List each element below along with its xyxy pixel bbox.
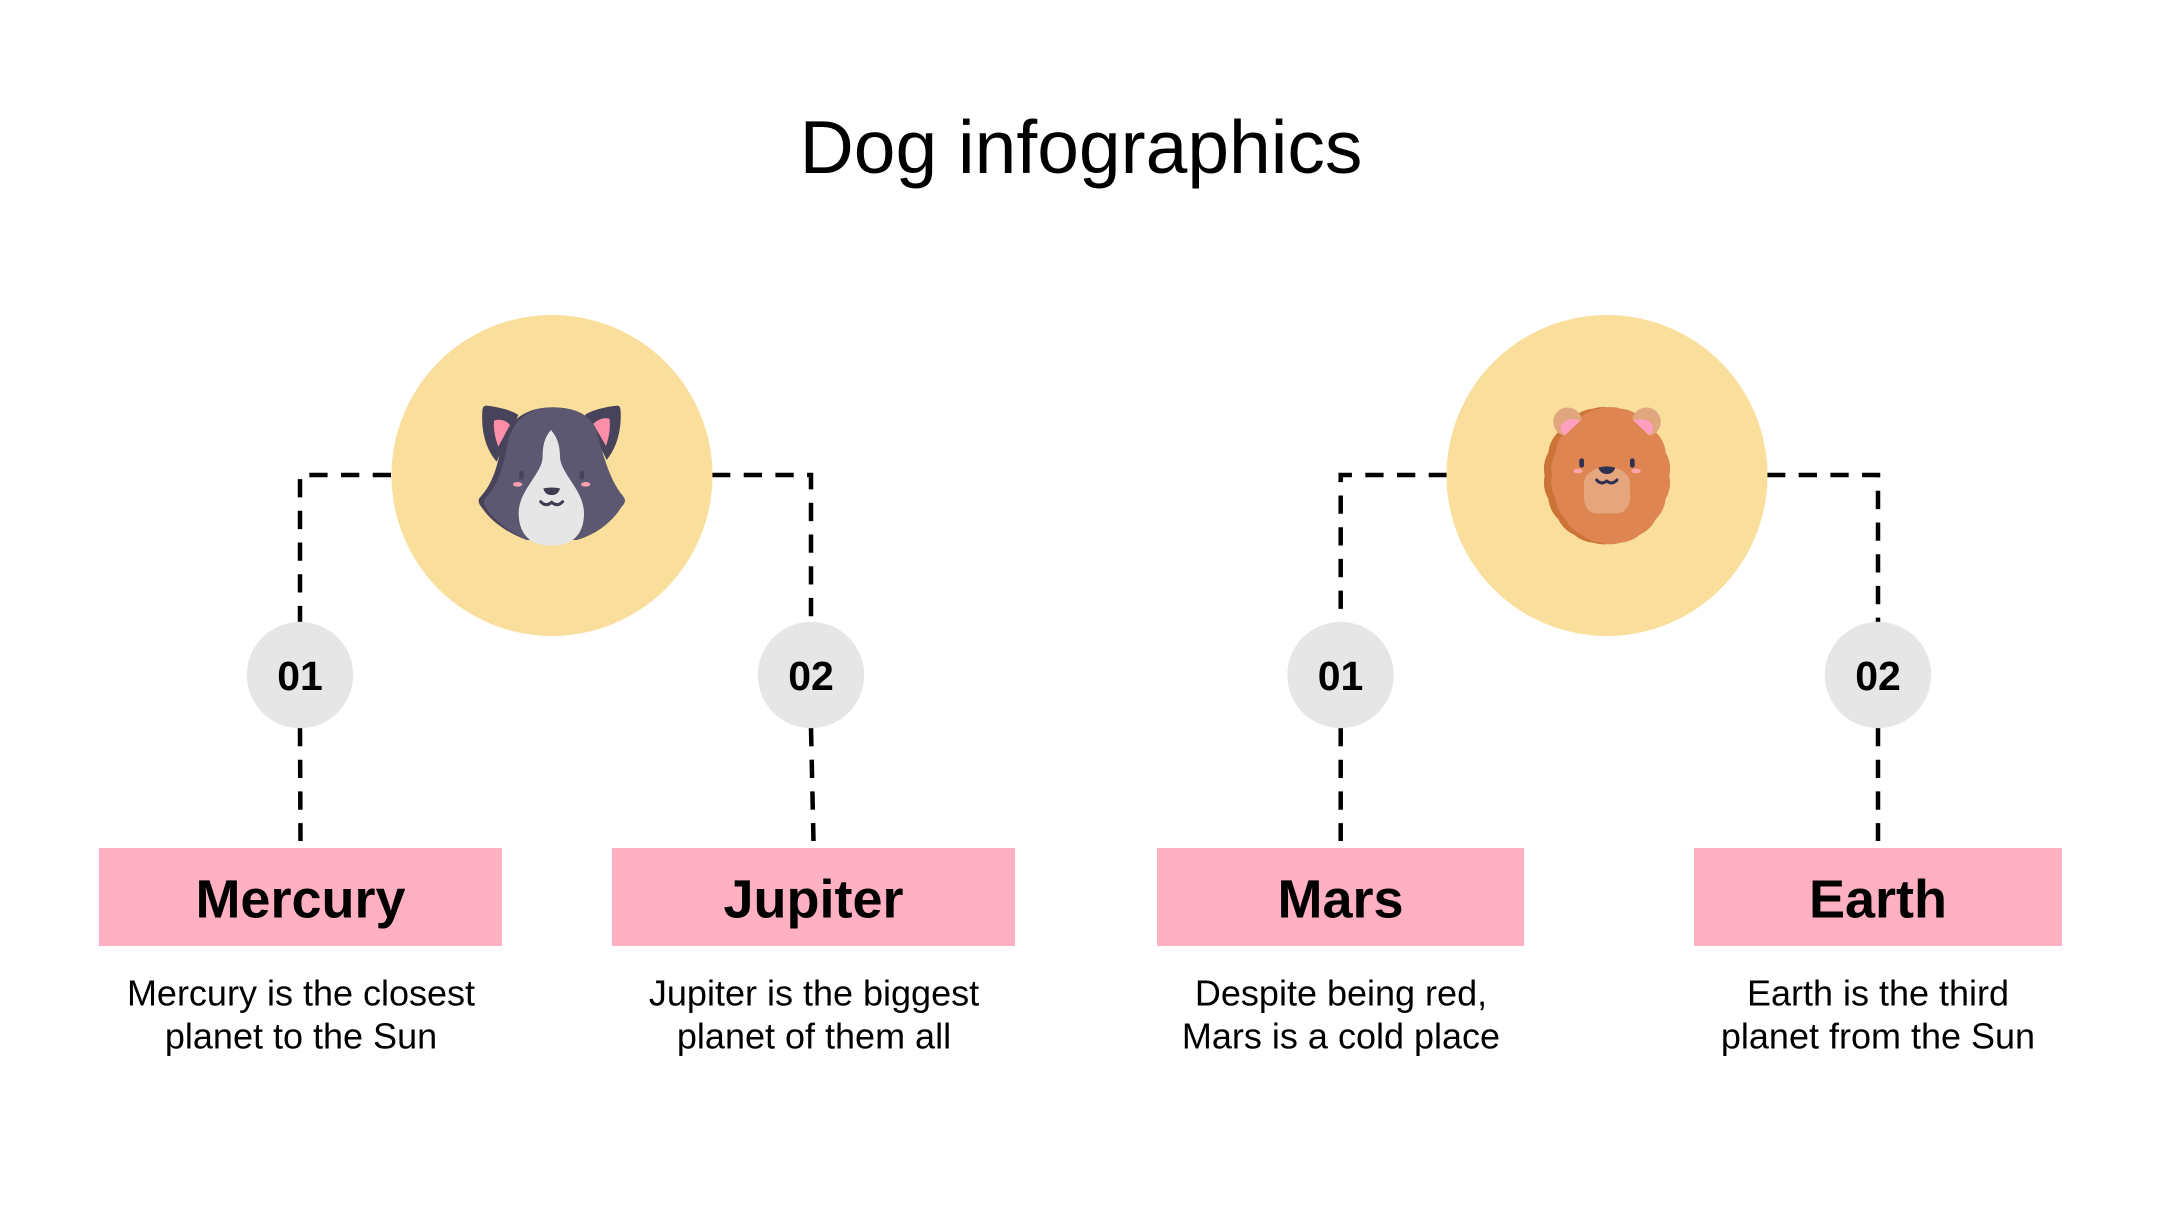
number badge: Mercury 01: 01 — [277, 653, 323, 699]
number badge: Jupiter 02 — [758, 622, 864, 728]
panel: Mars: Mars is a cold place — [1182, 1016, 1500, 1056]
title: Dog infographics — [800, 105, 1362, 189]
connector: bear to Earth — [1767, 475, 1878, 841]
panel: Jupiter: Jupiter — [723, 870, 904, 930]
connector: cat to Mercury — [300, 475, 391, 841]
bear badge — [1446, 315, 1768, 636]
number badge: Mars 01 — [1287, 622, 1394, 728]
panel: Jupiter — [612, 848, 1015, 1056]
icon: bear-faced dog — [1544, 407, 1670, 544]
panel: Mars: Despite being red, — [1195, 972, 1487, 1014]
panel: Mercury: Mercury is the closest — [127, 972, 475, 1014]
number badge: Earth 02 — [1825, 622, 1931, 728]
panel: Earth: planet from the Sun — [1721, 1016, 2035, 1056]
panel: Mercury: planet to the Sun — [165, 1016, 437, 1056]
panel: Jupiter: planet of them all — [677, 1016, 951, 1056]
number badge: Mercury 01 — [247, 622, 353, 728]
panel: Earth: Earth — [1809, 870, 1947, 930]
panel: Mercury — [99, 848, 502, 1056]
cat badge — [392, 315, 712, 636]
number badge: Mars 01: 01 — [1318, 653, 1363, 699]
connector: cat to Jupiter — [712, 475, 814, 841]
connector: bear to Mars — [1341, 475, 1447, 841]
panel: Earth: Earth is the third — [1747, 972, 2009, 1014]
number badge: Jupiter 02: 02 — [788, 653, 834, 699]
panel: Mars — [1157, 848, 1524, 1056]
number badge: Earth 02: 02 — [1855, 653, 1901, 699]
icon: cat-faced dog — [479, 406, 625, 546]
panel: Jupiter: Jupiter is the biggest — [649, 972, 979, 1014]
panel: Mars: Mars — [1277, 870, 1404, 930]
panel: Mercury: Mercury — [195, 870, 406, 930]
panel: Earth — [1694, 848, 2062, 1056]
